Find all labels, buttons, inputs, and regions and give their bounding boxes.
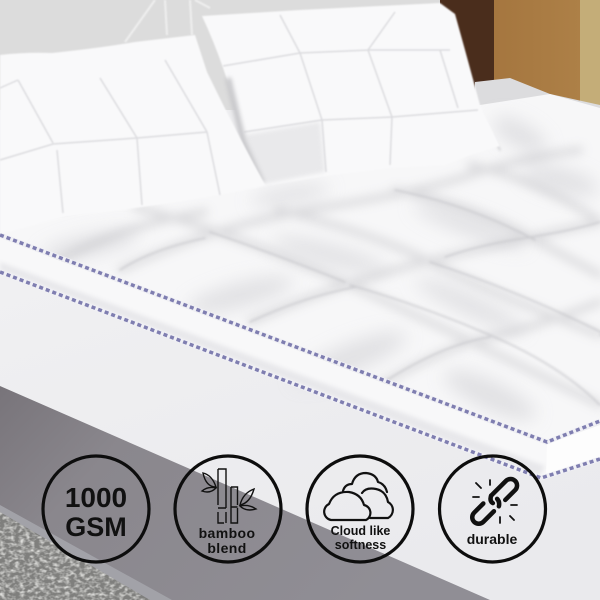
background: wooden wall panel [440,0,600,115]
icon: clouds [324,473,393,520]
badge: cloud like softness: Cloud like [331,524,390,538]
badge: 1000 GSM: GSM [65,512,127,542]
corner fold [546,425,600,478]
badge: durable: durable [467,531,517,547]
piping: lower edge [0,272,600,478]
topper quilting seams [45,112,600,405]
badge: bamboo blend: blend [207,540,247,556]
badge: 1000 GSM [43,456,149,562]
badge: cloud like softness: softness [335,538,386,552]
piping: upper edge [0,235,600,442]
carpet [0,505,172,600]
badge: 1000 GSM: 1000 [65,482,127,513]
topper side shadow [0,262,545,476]
badge: durable [440,456,546,562]
panel: left pillow [0,35,266,234]
panel: right pillow [202,3,500,186]
badge: bamboo blend: bamboo [199,525,255,541]
mattress topper surface [0,94,600,442]
icon: broken chain link [470,476,520,526]
mattress back edge [470,78,600,240]
panel: topper side band [0,238,600,478]
topper pad shading [39,110,600,429]
badge: bamboo blend [175,456,281,562]
panel: grey bed base [0,386,490,600]
panel: bed skirt [0,270,600,600]
badge: cloud like softness [307,456,413,562]
icon: bamboo [202,469,256,523]
